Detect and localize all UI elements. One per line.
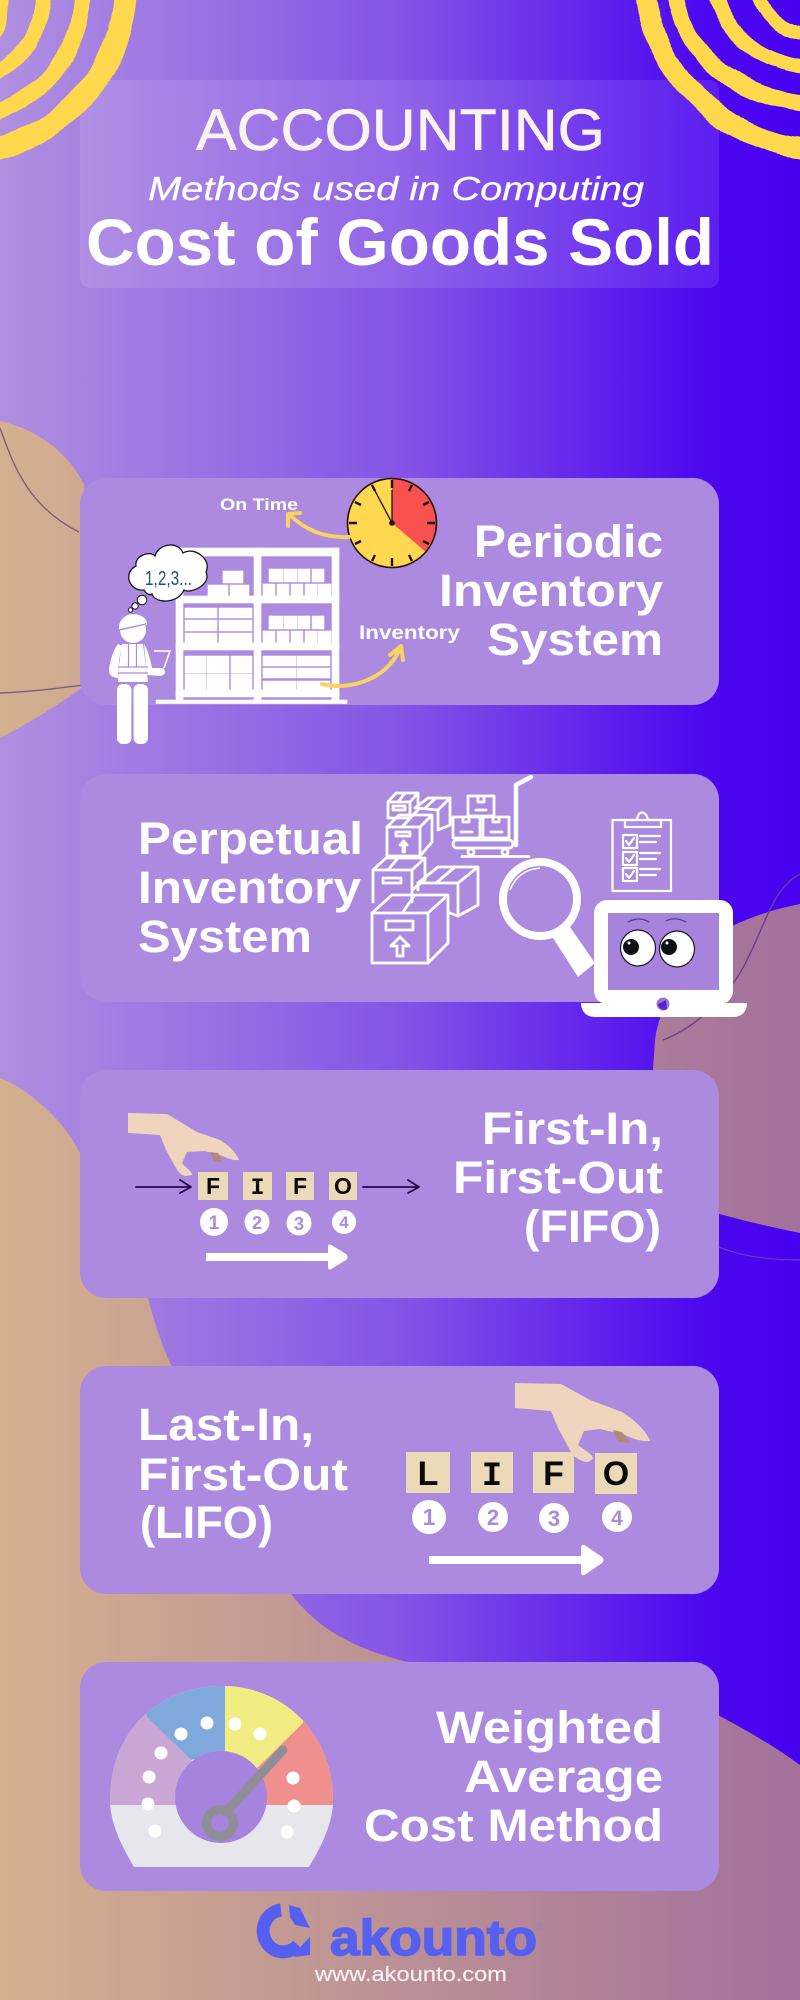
icon: warehouse shelves — [156, 548, 347, 704]
icon: laptop with eyes — [581, 900, 747, 1017]
heading: lifo — [138, 1399, 348, 1548]
heading: lifo: First-Out — [138, 1449, 348, 1500]
numbered circles 1 to 4: 1 — [423, 1504, 436, 1530]
arrow: into tiles — [136, 1180, 191, 1193]
subtitle: Methods used in Computing — [148, 170, 645, 207]
heading: fifo: (FIFO) — [524, 1201, 661, 1252]
numbered circles 1 to 4: 1 — [209, 1213, 220, 1234]
numbered circles 1 to 4: 4 — [339, 1213, 349, 1232]
website url: www.akounto.com — [314, 1964, 507, 1986]
tiles: f i f o: F — [206, 1173, 220, 1199]
icon: magnifying glass — [503, 862, 595, 977]
title panel — [80, 80, 719, 288]
heading: perpetual inventory system: Inventory — [138, 862, 361, 913]
decorative yellow rings top right — [645, 0, 800, 149]
heading: periodic inventory system — [439, 516, 663, 665]
tiles: l i f o: I — [482, 1458, 502, 1496]
heading: fifo: First-Out — [453, 1152, 663, 1203]
panel: last-in first-out — [80, 1366, 719, 1594]
arrow: out of tiles — [363, 1180, 419, 1193]
heading: periodic inventory system: Periodic — [474, 516, 663, 567]
arrow: direction — [206, 1244, 348, 1270]
numbered circles 1 to 4: 3 — [294, 1214, 304, 1234]
heading: weighted average cost method: Cost Method — [364, 1800, 663, 1851]
heading: fifo — [453, 1103, 663, 1252]
heading: weighted average cost method — [364, 1702, 663, 1851]
icon: gauge — [110, 1686, 333, 1867]
thought bubble: counting: 1,2,3... — [145, 568, 192, 590]
heading: weighted average cost method: Average — [464, 1751, 663, 1802]
tiles: f i f o: I — [251, 1175, 264, 1201]
heading: perpetual inventory system: Perpetual — [138, 813, 363, 864]
panel: perpetual inventory system — [80, 774, 747, 1017]
blob: right mauve shape — [653, 874, 800, 1260]
numbered circles 1 to 4: 2 — [252, 1213, 262, 1233]
arrow: shelf to inventory — [322, 646, 403, 686]
tiles: l i f o — [406, 1452, 637, 1496]
title: cost of goods sold: Cost of Goods Sold — [86, 205, 714, 279]
panel: periodic inventory system — [80, 478, 719, 744]
tiles: f i f o: F — [293, 1173, 307, 1199]
arrow: clock to on time — [288, 513, 349, 537]
tiles: f i f o — [198, 1172, 357, 1201]
heading: weighted average cost method: Weighted — [436, 1702, 663, 1753]
numbered circles 1 to 4: 3 — [548, 1506, 560, 1531]
numbered circles 1 to 4 — [200, 1208, 356, 1236]
numbered circles 1 to 4: 4 — [611, 1507, 623, 1530]
decorative yellow rings top left — [0, 0, 126, 151]
heading: periodic inventory system: System — [487, 614, 663, 665]
title: accounting: ACCOUNTING — [196, 98, 605, 163]
tiles: l i f o: O — [603, 1455, 629, 1493]
heading: perpetual inventory system: System — [138, 911, 312, 962]
icon: hand picking first tile — [128, 1113, 239, 1176]
icon: worker — [109, 614, 170, 744]
icon: hand truck with boxes — [453, 777, 531, 856]
numbered circles 1 to 4 — [412, 1500, 632, 1534]
panel: weighted average cost method — [80, 1662, 719, 1891]
icon: clipboard checklist — [612, 812, 671, 891]
thought bubble: counting — [128, 545, 207, 612]
tiles: l i f o: L — [418, 1455, 438, 1493]
label: on time: On Time — [220, 495, 298, 514]
heading: lifo: (LIFO) — [140, 1497, 273, 1548]
blob: large lower left shape — [0, 1078, 800, 2000]
label: inventory: Inventory — [359, 623, 460, 644]
arrow: direction — [429, 1545, 604, 1575]
heading: lifo: Last-In, — [138, 1399, 314, 1450]
panel: first-in first-out — [80, 1070, 719, 1298]
icon: stacked boxes — [372, 793, 478, 963]
logo: akounto — [263, 1905, 543, 1966]
registered mark: ® — [536, 1921, 543, 1931]
logo icon — [263, 1905, 310, 1957]
numbered circles 1 to 4: 2 — [487, 1505, 499, 1530]
icon: clock — [348, 478, 437, 568]
heading: fifo: First-In, — [482, 1103, 663, 1154]
heading: periodic inventory system: Inventory — [439, 565, 663, 616]
blob: upper left tan shape — [0, 421, 92, 738]
logo wordmark: akounto — [330, 1910, 537, 1966]
icon: hand picking last tile — [515, 1383, 650, 1462]
heading: perpetual inventory system — [138, 813, 363, 962]
tiles: f i f o: O — [334, 1173, 352, 1199]
tiles: l i f o: F — [543, 1455, 564, 1493]
